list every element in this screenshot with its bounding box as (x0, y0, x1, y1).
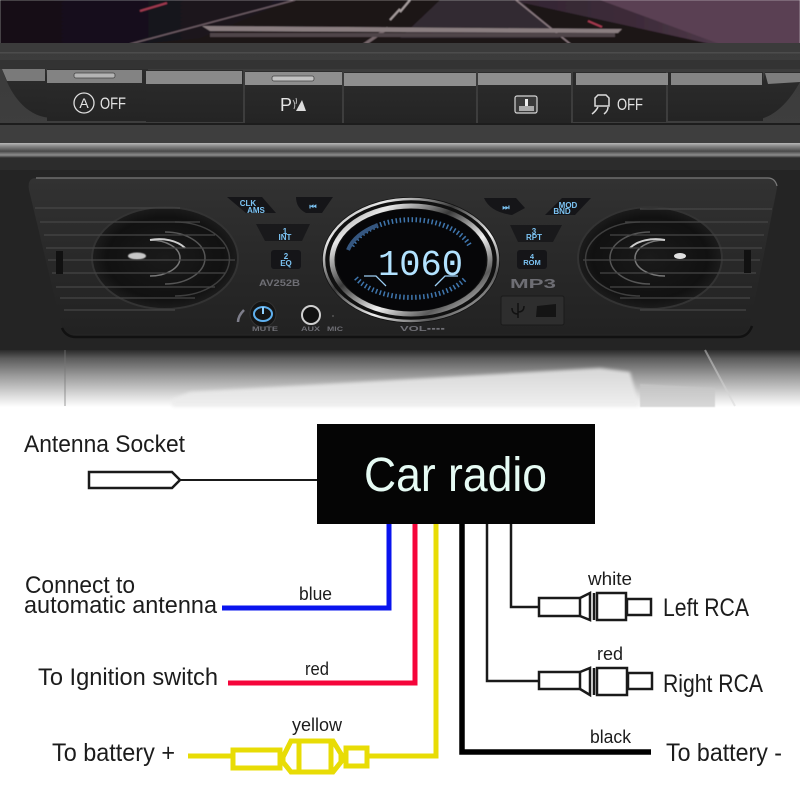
right control buttons: 4 (530, 252, 535, 261)
button icon: traction control off (592, 95, 643, 114)
right control buttons: ⏭ (502, 203, 510, 212)
car radio box: Car radio (364, 449, 547, 502)
left control buttons: INT (279, 233, 292, 242)
label: blue: blue (299, 584, 332, 604)
model label: AV252B (259, 278, 300, 289)
lower console carbon fibre (0, 350, 800, 407)
upper dashboard (0, 43, 800, 170)
mute power button and aux: MIC (327, 326, 343, 333)
left control buttons: EQ (280, 259, 292, 268)
photo: car dashboard with radio (0, 0, 800, 407)
mute power button and aux: MUTE (252, 326, 279, 333)
right control buttons: 3 (532, 227, 537, 236)
frequency readout: 1060 (378, 245, 463, 286)
mute power button and aux (238, 301, 343, 333)
button strip (2, 69, 800, 123)
left control buttons: 2 (284, 252, 289, 261)
right control buttons: BND (553, 207, 571, 216)
wiring diagram (24, 424, 782, 772)
label: connect to automatic antenna (24, 572, 218, 619)
label: connect to automatic antenna: automatic antenna (24, 592, 218, 619)
USB and SD port cover (501, 296, 564, 325)
volume label: VOL▪▪▪▪ (400, 326, 446, 333)
label: red RCA: red (597, 644, 623, 664)
label: white: white (587, 569, 632, 589)
car radio box (317, 424, 595, 524)
windshield road view (0, 0, 800, 60)
right control buttons: MOD (559, 201, 578, 210)
right speaker (578, 207, 772, 310)
label: red wire: red (305, 659, 329, 679)
right control buttons: ROM (523, 258, 541, 267)
yellow wire with fuse (188, 524, 436, 772)
button icon: park sensor (280, 95, 306, 115)
left control buttons (227, 197, 333, 269)
left control buttons: CLK (240, 199, 256, 208)
label: connect to automatic antenna: Connect to (25, 572, 135, 599)
right RCA lead (487, 524, 652, 695)
label: right RCA: Right RCA (663, 670, 763, 698)
red wire (228, 524, 415, 683)
button icon: hill descent (515, 96, 537, 113)
button icon: auto start stop off: OFF (100, 94, 126, 113)
chrome strip (0, 143, 800, 158)
antenna connector and wire (89, 472, 317, 488)
label: yellow: yellow (292, 715, 343, 735)
central display gauge (322, 197, 500, 323)
label: to battery minus: To battery - (666, 739, 782, 767)
left speaker (35, 207, 238, 310)
label: to battery plus: To battery + (52, 739, 175, 767)
right control buttons (484, 198, 591, 269)
button icon: auto start stop off: A (79, 95, 89, 111)
button icon: traction control off: OFF (617, 95, 643, 114)
antenna socket label: Antenna Socket (24, 431, 185, 458)
button icon: park sensor: P (280, 95, 292, 115)
blue wire (222, 524, 389, 608)
left RCA lead (511, 524, 651, 620)
black wire (462, 524, 651, 752)
left control buttons: 1 (283, 227, 288, 236)
left control buttons: AMS (247, 206, 266, 215)
mute power button and aux: AUX (301, 326, 321, 333)
left control buttons: ⏮ (309, 202, 317, 211)
label: left RCA: Left RCA (663, 594, 749, 622)
label: black: black (590, 727, 632, 747)
MP3 logo: MP3 (510, 276, 556, 291)
radio face panel (29, 178, 777, 337)
right control buttons: RPT (526, 233, 542, 242)
label: to ignition switch: To Ignition switch (38, 664, 218, 691)
button icon: auto start stop off (74, 93, 126, 113)
